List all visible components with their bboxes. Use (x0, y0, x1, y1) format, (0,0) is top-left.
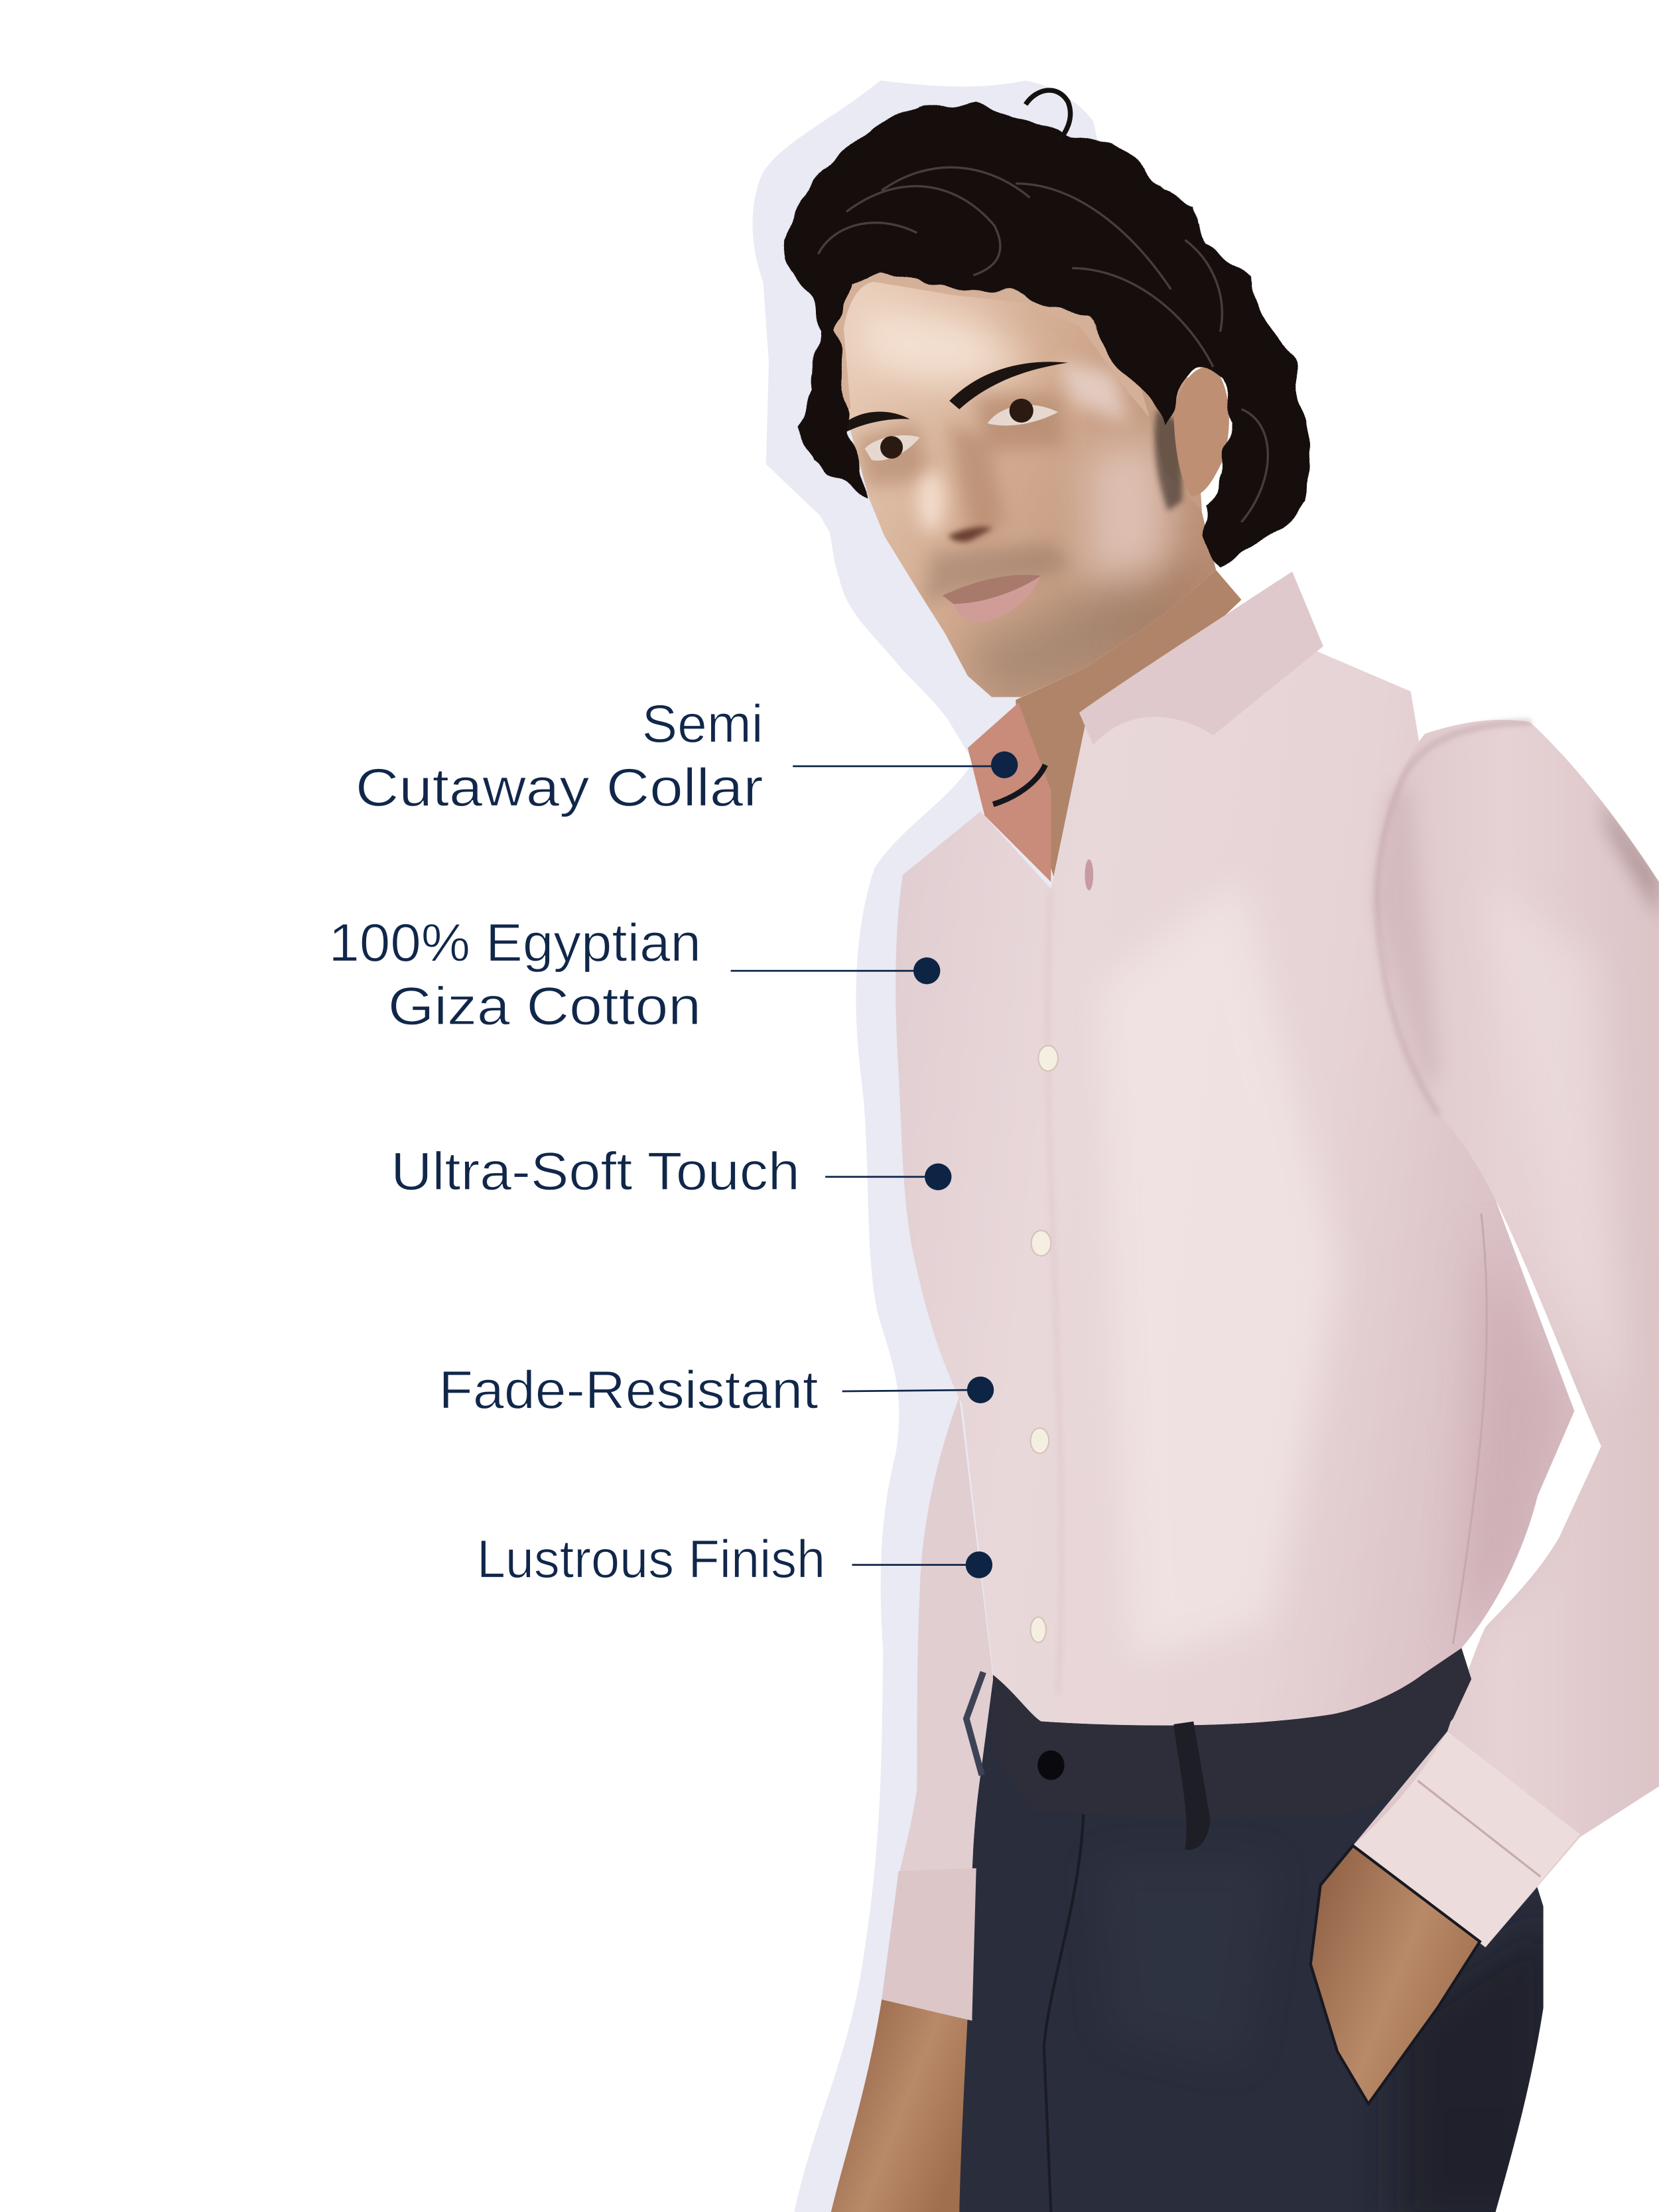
label: Semi (642, 695, 763, 754)
sideburn (1155, 409, 1182, 511)
buttonhole (1085, 859, 1093, 890)
shirt body (896, 649, 1574, 1726)
label: Cutaway Collar (356, 758, 763, 817)
eye shadow (855, 395, 1065, 487)
shirt shading (1100, 790, 1659, 1665)
backdrop silhouette (753, 80, 1128, 2212)
right cuff (1353, 1732, 1580, 1947)
forehead highlight (860, 303, 1037, 388)
callout: semi cutaway collar (356, 695, 1018, 817)
front belt loop (1173, 1722, 1211, 1850)
collar (1079, 571, 1323, 745)
trouser fly (1044, 1815, 1083, 2212)
collar trim (993, 765, 1045, 804)
label: Giza Cotton (388, 977, 701, 1036)
nose shade (948, 423, 1004, 543)
mouth (943, 575, 1041, 622)
callout: ultra-soft touch (391, 1142, 951, 1202)
left cuff (882, 1868, 976, 2021)
neck shadow (1114, 565, 1227, 656)
trousers (959, 1648, 1544, 2212)
temple highlight (1058, 360, 1128, 423)
label: Lustrous Finish (477, 1530, 825, 1590)
label (329, 913, 701, 1036)
chin stubble (965, 579, 1171, 700)
label: 100% Egyptian (329, 913, 701, 973)
hair (787, 90, 1311, 567)
left hand (831, 2000, 972, 2212)
shirt buttons (1031, 1046, 1058, 1643)
face (835, 273, 1227, 700)
callout: lustrous finish (477, 1530, 992, 1590)
inner collar (968, 703, 1051, 882)
infographic canvas (333, 81, 1659, 2212)
label: Ultra-Soft Touch (391, 1142, 800, 1202)
waistband (993, 1648, 1471, 1817)
hair strands (818, 167, 1268, 522)
neck (1016, 570, 1241, 882)
ear (1173, 367, 1229, 497)
nose highlight (917, 470, 945, 532)
right sleeve (1353, 720, 1659, 1947)
callout: fade-resistant (438, 1361, 994, 1420)
shirt placket (1047, 889, 1061, 1693)
hairline skin underlay (835, 273, 1178, 437)
label (356, 695, 763, 817)
mustache stubble (924, 543, 1072, 607)
label: Fade-Resistant (438, 1361, 818, 1420)
sleeve seam (1377, 723, 1530, 1115)
waist button (1037, 1750, 1065, 1780)
nose (948, 527, 993, 542)
eyes (865, 399, 1058, 460)
left belt loop (966, 1672, 983, 1775)
cheek highlight (1087, 437, 1171, 592)
shirt stitching (1418, 1213, 1540, 1877)
callout: egyptian giza cotton (329, 913, 940, 1036)
man figure (787, 90, 1659, 2212)
trouser tonal shading (1394, 1937, 1543, 2212)
pocket hand (1311, 1846, 1480, 2104)
hair curl (1026, 90, 1071, 141)
skin between temple and ear (1136, 370, 1202, 511)
eyebrows (842, 362, 1068, 432)
left sleeve (882, 1397, 993, 2021)
